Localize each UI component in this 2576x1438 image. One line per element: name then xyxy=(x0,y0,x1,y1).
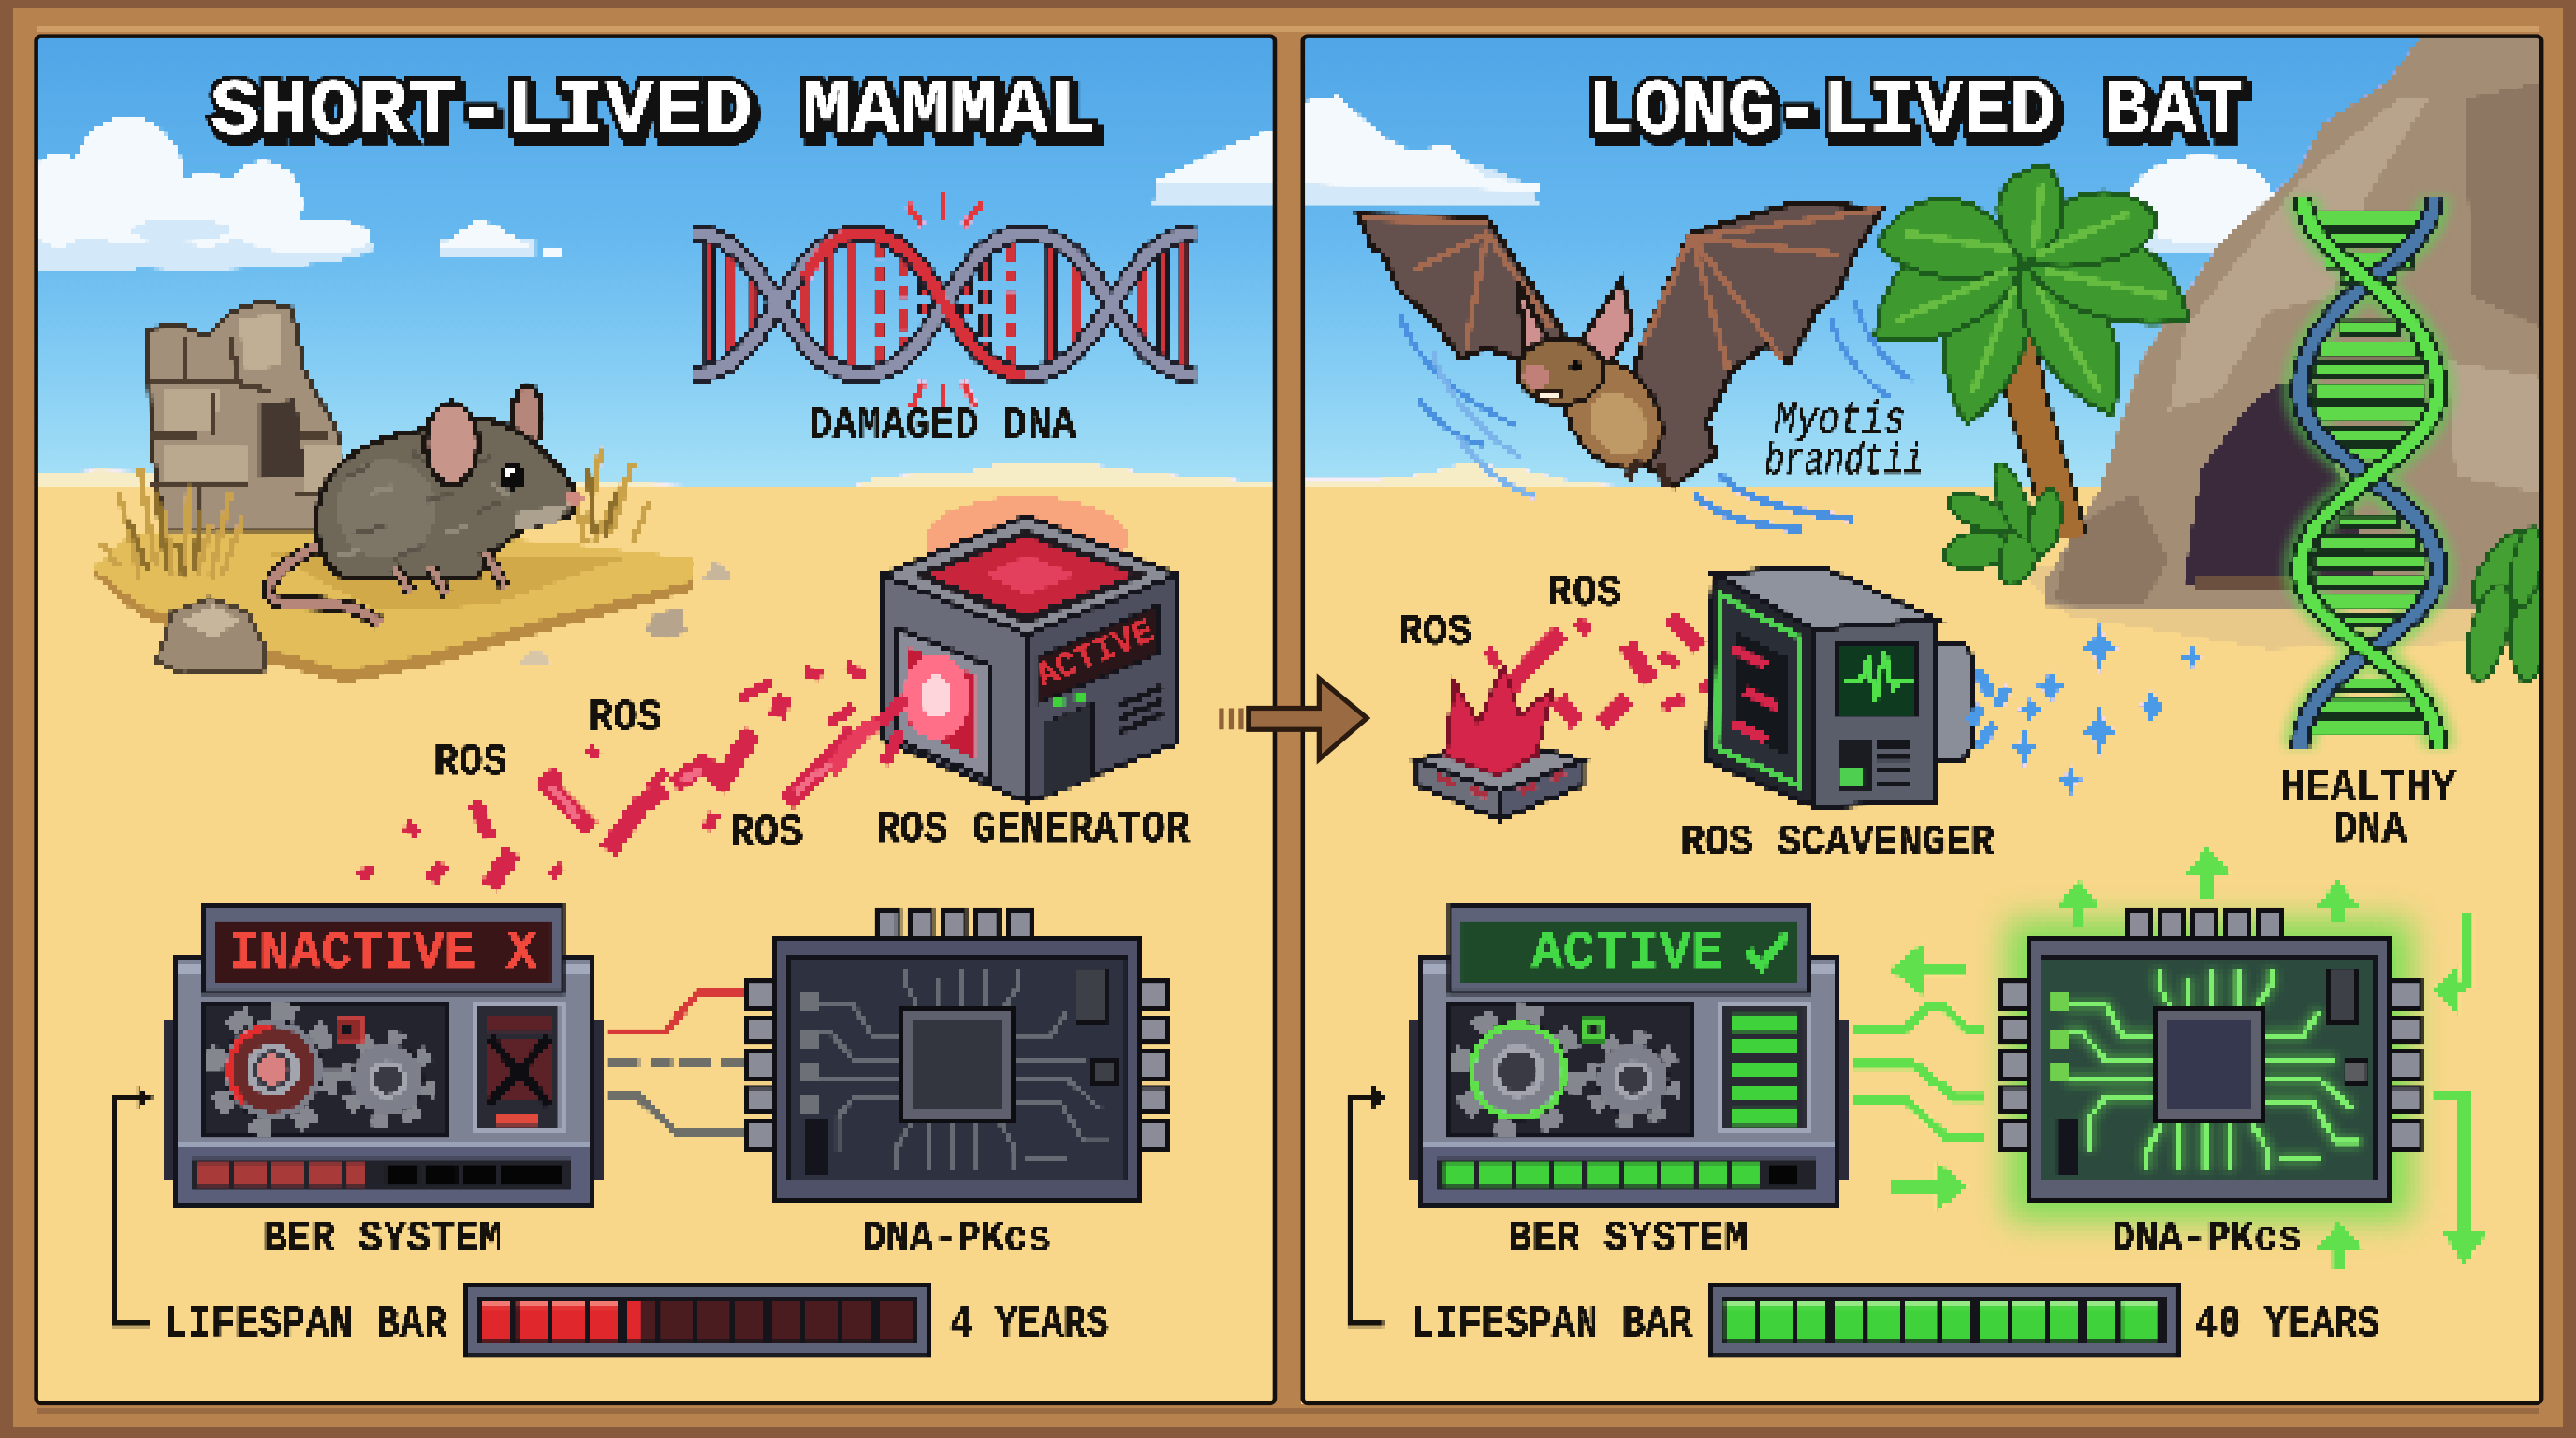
label: ROS scavenger: ROS SCAVENGER xyxy=(1680,819,1995,869)
ROS particles xyxy=(1486,616,1717,723)
label: healthy DNA xyxy=(2280,765,2456,856)
icon: check mark xyxy=(1748,933,1788,966)
label: DNA-PKcs: DNA-PKcs xyxy=(2111,1215,2302,1265)
panel: long-lived bat xyxy=(1303,37,2553,1406)
title: long-lived bat: LONG-LIVED BAT xyxy=(1587,68,2244,157)
swoosh lines xyxy=(1399,299,1912,529)
label: lifespan bar: LIFESPAN BAR xyxy=(165,1300,447,1350)
label: generator active display: ACTIVE xyxy=(1031,612,1161,697)
BER system: active xyxy=(1410,907,1850,1206)
green activity arrows xyxy=(1889,846,2487,1269)
title: short-lived mammal: SHORT-LIVED MAMMAL xyxy=(215,75,1103,164)
bushes xyxy=(1940,460,2553,685)
beach sand xyxy=(1303,463,2541,1406)
wires xyxy=(607,992,748,1134)
label: ROS: ROS xyxy=(729,809,803,858)
species name xyxy=(1764,397,1924,487)
DNA-PKcs chip: dormant xyxy=(748,909,1168,1201)
species name: Myotis xyxy=(1775,397,1906,447)
healthy DNA helix xyxy=(2300,198,2438,748)
panel: short-lived mammal xyxy=(20,37,1275,1406)
icon: palm tree xyxy=(1876,165,2188,539)
status: active: ACTIVE xyxy=(1531,924,1723,985)
icon: flying bat xyxy=(1358,202,1882,487)
lifespan bar: 40 years xyxy=(1710,1284,2177,1357)
title: short-lived mammal: SHORT-LIVED MAMMAL xyxy=(211,68,1097,157)
label: ROS: ROS xyxy=(433,739,507,788)
label: ROS: ROS xyxy=(1398,609,1472,658)
green wires xyxy=(1855,1005,1984,1138)
label: 40 years: 40 YEARS xyxy=(2195,1300,2380,1350)
dry grass tufts xyxy=(102,447,649,579)
species name: brandtii xyxy=(1764,437,1924,487)
cliff with cave xyxy=(2012,37,2541,649)
DNA-PKcs chip: active with glow xyxy=(1999,909,2420,1221)
label: BER system: BER SYSTEM xyxy=(1508,1215,1748,1265)
sky xyxy=(1303,37,2541,488)
lifespan bar: 4 years xyxy=(466,1284,929,1357)
label: damaged DNA: DAMAGED DNA xyxy=(809,402,1076,451)
rocks xyxy=(156,560,731,674)
label: BER system: BER SYSTEM xyxy=(263,1215,503,1265)
lifespan feedback arrow xyxy=(1349,1086,1386,1325)
clouds xyxy=(1303,95,2274,255)
label: DNA-PKcs: DNA-PKcs xyxy=(862,1215,1051,1265)
stone ruin xyxy=(148,301,348,529)
sky xyxy=(37,37,1275,488)
icon: ROS burner crate xyxy=(1418,666,1582,820)
arrow: from mammal to bat xyxy=(1219,679,1367,759)
beach sand xyxy=(37,463,1275,1406)
label: lifespan bar: LIFESPAN BAR xyxy=(1412,1300,1692,1350)
icon: ROS generator xyxy=(879,496,1178,801)
ROS particles xyxy=(359,666,896,888)
damaged DNA helix xyxy=(694,191,1196,414)
BER system: inactive xyxy=(165,907,605,1206)
status: inactive: INACTIVE X xyxy=(228,924,537,985)
blue sparkles xyxy=(1971,622,2203,798)
icon: mouse xyxy=(269,385,583,624)
label: ROS generator: ROS GENERATOR xyxy=(875,806,1190,856)
label: ROS: ROS xyxy=(1547,569,1621,619)
clouds xyxy=(20,117,1275,270)
title: long-lived bat: LONG-LIVED BAT xyxy=(1592,75,2249,164)
lifespan feedback arrow xyxy=(115,1086,153,1325)
label: ROS: ROS xyxy=(588,694,662,743)
label: 4 years: 4 YEARS xyxy=(949,1300,1109,1350)
sandy grass patch xyxy=(92,529,695,683)
label: healthy DNA: DNA xyxy=(2333,806,2408,856)
icon: ROS scavenger xyxy=(1707,567,1971,807)
label: healthy DNA: HEALTHY xyxy=(2280,765,2456,814)
